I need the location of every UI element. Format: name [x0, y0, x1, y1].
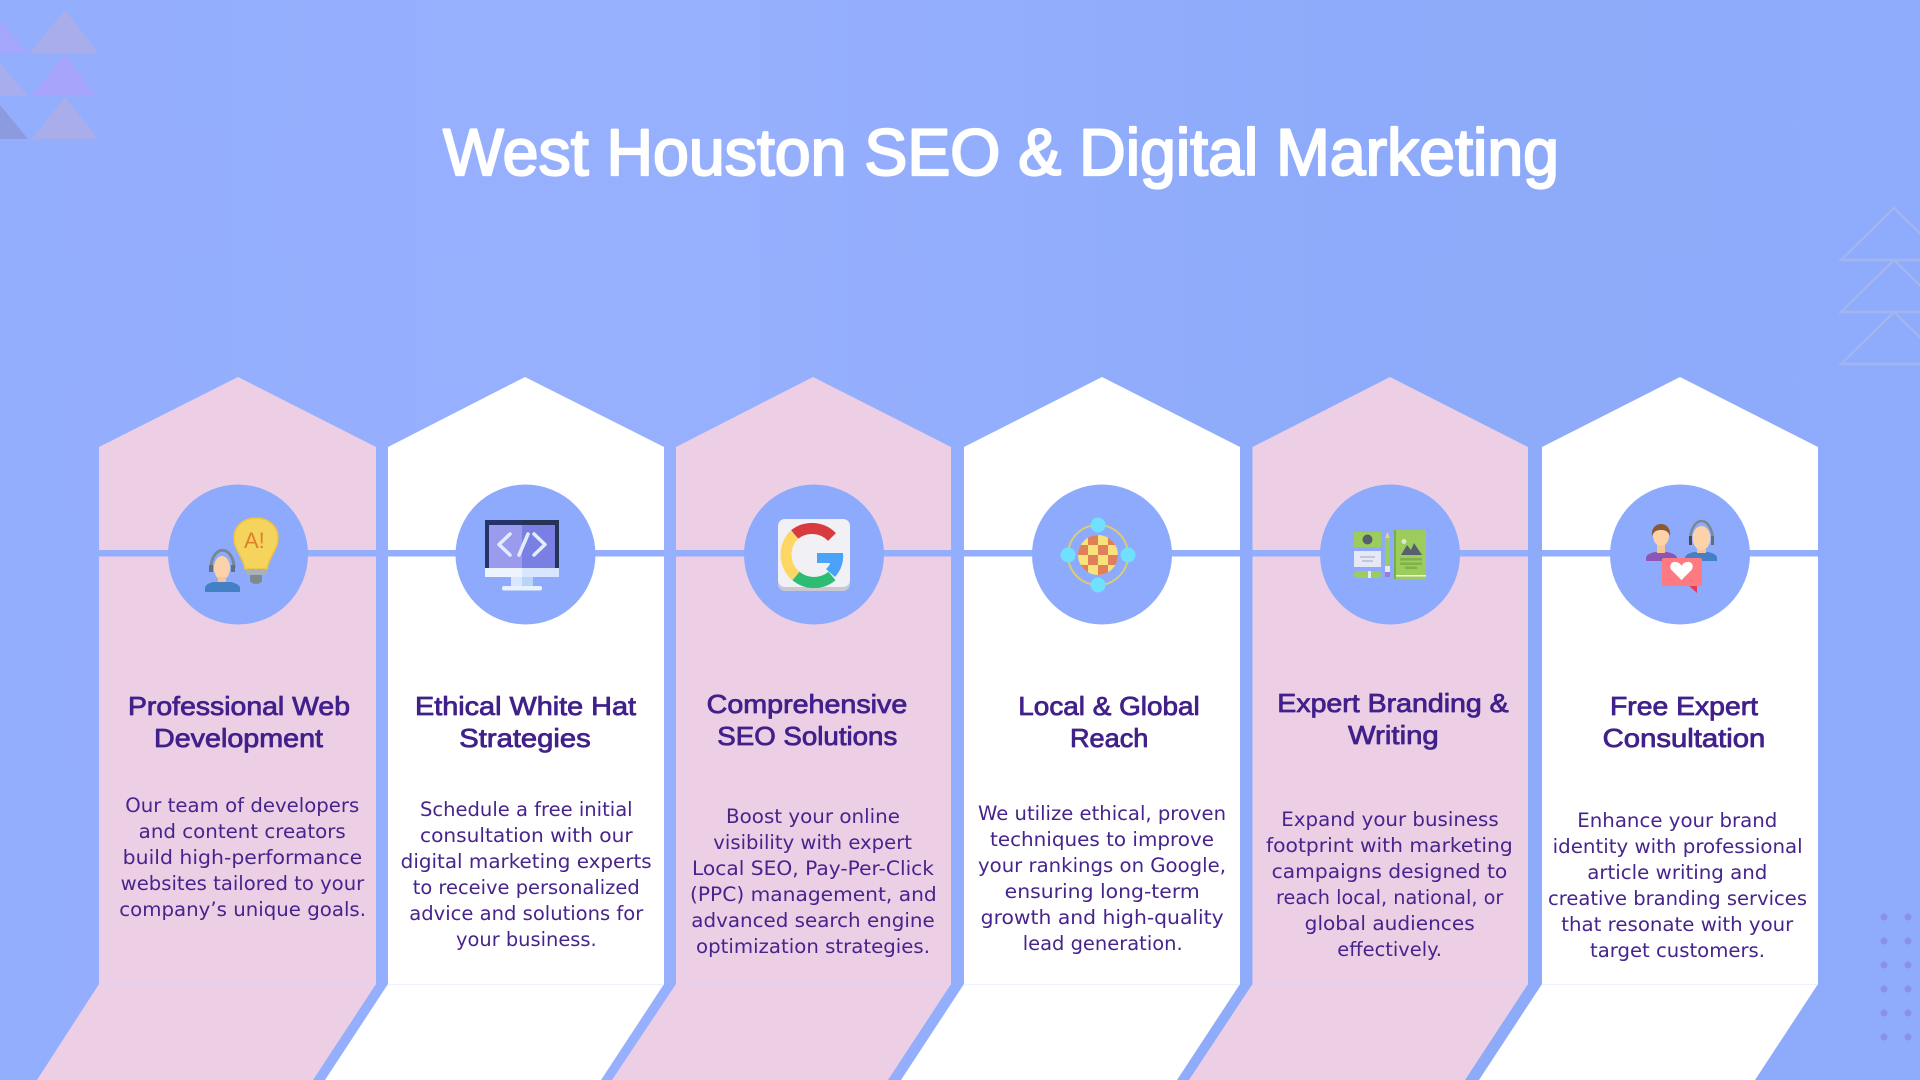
panel: local and global reach	[901, 377, 1240, 1080]
heading: Strategies	[459, 723, 591, 753]
title: West Houston SEO & Digital Marketing	[443, 115, 1559, 189]
heading: Free Expert	[1610, 691, 1759, 721]
description: build high-performance	[123, 846, 362, 869]
description: article writing and	[1587, 861, 1767, 884]
description: ensuring long-term	[1005, 880, 1200, 903]
description: creative branding services	[1548, 887, 1807, 910]
description: We utilize ethical, proven	[978, 802, 1226, 825]
heading: Writing	[1348, 720, 1439, 750]
description: footprint with marketing	[1266, 834, 1513, 857]
description	[401, 798, 652, 951]
description: campaigns designed to	[1272, 860, 1507, 883]
heading: Local & Global	[1018, 691, 1200, 721]
description: effectively.	[1337, 938, 1442, 961]
description: reach local, national, or	[1276, 886, 1504, 909]
icon: globe with orbit	[1060, 518, 1136, 592]
heading	[128, 691, 350, 753]
description: target customers.	[1590, 939, 1765, 962]
description: Local SEO, Pay-Per-Click	[692, 857, 935, 880]
description	[1548, 809, 1807, 962]
heading: Professional Web	[128, 691, 350, 721]
decoration: filled triangles top left	[0, 10, 98, 139]
description: Enhance your brand	[1577, 809, 1777, 832]
heading	[1277, 688, 1509, 750]
description: advanced search engine	[691, 909, 935, 932]
icon: person with idea bulb	[205, 518, 278, 592]
heading: Expert Branding &	[1277, 688, 1509, 718]
description: to receive personalized	[413, 876, 640, 899]
description: identity with professional	[1553, 835, 1803, 858]
description: Expand your business	[1281, 808, 1499, 831]
icon: code monitor	[485, 520, 559, 590]
description: lead generation.	[1023, 932, 1183, 955]
description: visibility with expert	[713, 831, 912, 854]
heading	[1603, 691, 1765, 753]
heading: Ethical White Hat	[415, 691, 637, 721]
panel: free expert consultation	[1479, 377, 1818, 1080]
description: company’s unique goals.	[119, 898, 366, 921]
panel: expert branding and writing	[1189, 377, 1528, 1080]
description: growth and high-quality	[981, 906, 1224, 929]
heading: SEO Solutions	[717, 721, 897, 751]
description	[1266, 808, 1513, 961]
description: global audiences	[1305, 912, 1475, 935]
icon: google g	[778, 519, 850, 591]
description: techniques to improve	[990, 828, 1214, 851]
description	[978, 802, 1226, 955]
decoration: dot grid bottom right	[1880, 914, 1912, 1040]
description: Schedule a free initial	[420, 798, 633, 821]
description: and content creators	[139, 820, 346, 843]
heading	[415, 691, 637, 753]
icon: branding stationery	[1354, 530, 1426, 579]
description: advice and solutions for	[409, 902, 644, 925]
heading: Reach	[1070, 723, 1148, 753]
description	[119, 794, 366, 921]
description: optimization strategies.	[696, 935, 930, 958]
description: your rankings on Google,	[978, 854, 1226, 877]
description: consultation with our	[420, 824, 634, 847]
heading: Development	[154, 723, 324, 753]
description: your business.	[456, 928, 597, 951]
heading	[707, 689, 907, 751]
description: that resonate with your	[1561, 913, 1794, 936]
description: (PPC) management, and	[690, 883, 937, 906]
panel: professional web development	[37, 377, 376, 1080]
icon: person with idea bulb: A!	[244, 528, 265, 553]
panel: comprehensive seo solutions	[612, 377, 951, 1080]
heading: Consultation	[1603, 723, 1765, 753]
description: Boost your online	[726, 805, 900, 828]
icon: consultants with heart bubble	[1646, 521, 1717, 593]
panel: ethical white hat strategies	[325, 377, 664, 1080]
heading	[1018, 691, 1200, 753]
description: Our team of developers	[125, 794, 359, 817]
description	[690, 805, 937, 958]
decoration: outlined triangles right	[1841, 208, 1920, 364]
description: websites tailored to your	[121, 872, 365, 895]
description: digital marketing experts	[401, 850, 652, 873]
heading: Comprehensive	[707, 689, 907, 719]
